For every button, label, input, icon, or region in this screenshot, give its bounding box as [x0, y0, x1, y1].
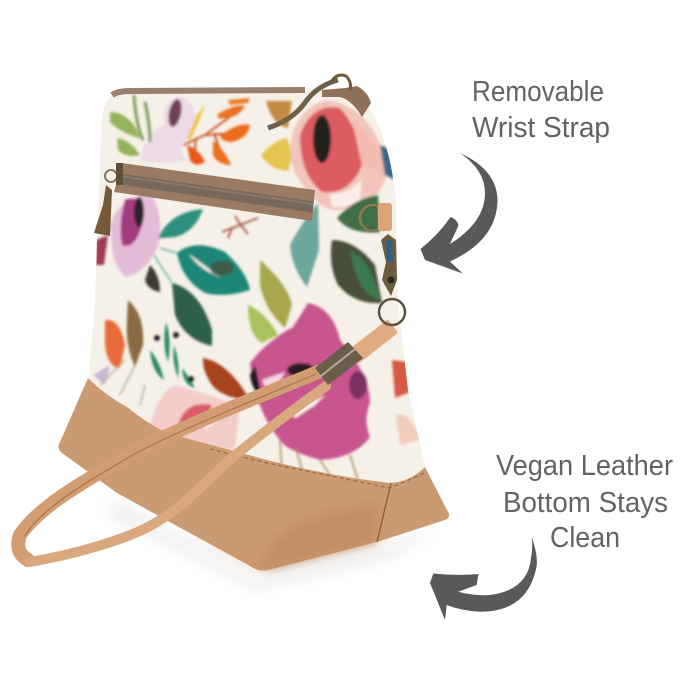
leather seam	[377, 483, 391, 542]
pale bloom, right edge	[396, 414, 420, 445]
red bloom, right edge	[392, 360, 410, 398]
yellow-green leaf	[248, 305, 278, 343]
braided strap tab at top	[322, 86, 371, 117]
pale teal leaf	[290, 203, 319, 287]
callout text: vegan leather bottom: Clean	[550, 522, 620, 554]
cord ring	[360, 205, 386, 231]
infographic canvas	[11, 74, 673, 620]
wrist strap	[18, 326, 393, 562]
leather shaded lower face	[180, 505, 378, 570]
callout text: vegan leather bottom	[496, 450, 673, 554]
callout text: removable wrist strap: Wrist Strap	[472, 112, 610, 144]
floral print	[93, 95, 420, 490]
blue spots, right edge	[380, 145, 395, 180]
arrow: toward wrist strap	[420, 153, 498, 274]
yellow leaf	[261, 138, 291, 171]
red flower	[290, 100, 389, 210]
pale pink flower, top	[140, 97, 195, 163]
dark leaf, right	[331, 240, 382, 303]
strap ferrule	[315, 342, 363, 385]
callout text: vegan leather bottom: Bottom Stays	[503, 487, 668, 519]
green sprigs	[150, 322, 195, 388]
cord barrel	[378, 203, 392, 231]
lower swivel ring	[379, 299, 405, 325]
purple flower	[96, 195, 160, 277]
small dark leaf	[145, 265, 160, 292]
teal leaf, small	[158, 209, 203, 238]
green leaves, top left	[110, 95, 150, 156]
callout text: removable wrist strap	[472, 76, 610, 144]
orange sprig	[168, 98, 250, 165]
dark green leaf behind ring	[337, 195, 380, 232]
pink flower, lower left	[150, 385, 240, 450]
red-brown leaf	[203, 358, 250, 400]
ground shadow	[110, 500, 440, 588]
strap hook at top	[268, 75, 350, 128]
top zipper	[112, 90, 305, 95]
dark green leaf	[172, 283, 212, 346]
bag body: floral canvas	[88, 88, 425, 490]
vegan leather bottom	[58, 378, 449, 570]
brown leaf under strap hook	[266, 101, 292, 128]
callout text: removable wrist strap: Removable	[472, 76, 604, 108]
front pocket zipper	[114, 163, 315, 221]
leather stitching	[210, 449, 425, 488]
callout text: vegan leather bottom: Vegan Leather	[496, 450, 673, 482]
big pink flower	[250, 303, 370, 490]
large teal leaf	[154, 245, 250, 295]
orange flower and brown leaf, left	[93, 300, 145, 405]
olive leaf	[260, 260, 292, 328]
lobster clasp	[381, 234, 397, 296]
zipper pull	[94, 163, 123, 236]
arrow: toward leather bottom	[430, 537, 537, 620]
small brown sprig	[222, 216, 258, 238]
